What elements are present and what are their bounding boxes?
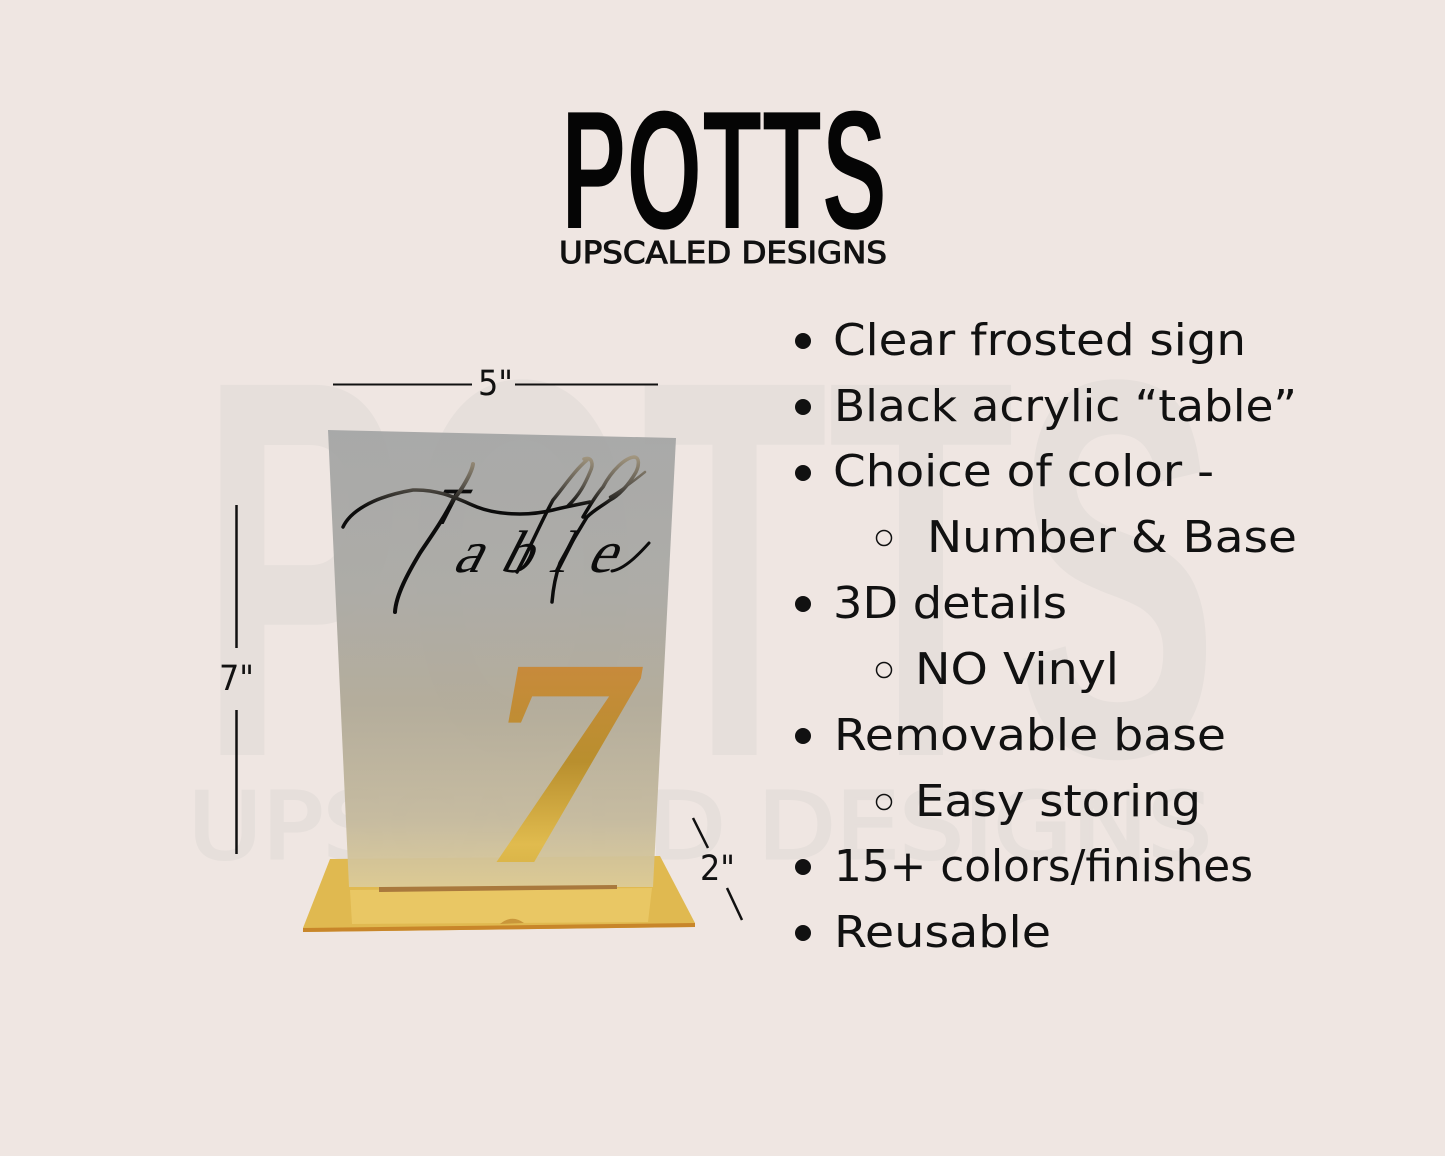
script flourishes xyxy=(343,457,649,612)
watermark: UPSCALED DESIGNS xyxy=(188,773,1212,880)
item: reusable: Reusable xyxy=(834,907,1051,958)
dimension: depth 2 inches xyxy=(693,818,742,920)
script word: Table: able xyxy=(445,518,659,585)
feature list xyxy=(795,315,1297,958)
dimension: width 5 inches: 5" xyxy=(478,364,513,404)
script word: Table xyxy=(343,457,678,612)
gold number 7: 7 xyxy=(484,597,647,927)
base slot xyxy=(379,885,617,892)
sub-item: number and base: Number & Base xyxy=(927,512,1297,563)
sub-item: no vinyl: NO Vinyl xyxy=(915,644,1119,695)
gold mirror base xyxy=(303,856,695,932)
item: black acrylic table: Black acrylic “table” xyxy=(834,381,1297,432)
item: removable base: Removable base xyxy=(834,710,1226,761)
product: table number sign xyxy=(303,430,695,932)
item: 3D details: 3D details xyxy=(833,578,1067,629)
subtitle: UPSCALED DESIGNS xyxy=(559,236,887,271)
script word: Table: T xyxy=(420,480,479,535)
item: clear frosted sign: Clear frosted sign xyxy=(833,315,1246,366)
frosted sign panel xyxy=(328,430,676,887)
title: POTTS xyxy=(561,75,887,266)
dimension: height 7 inches: 7" xyxy=(219,659,254,699)
item: choice of color: Choice of color - xyxy=(833,446,1214,497)
dimension: depth 2 inches: 2" xyxy=(700,849,735,889)
item: colors and finishes: 15+ colors/finishes xyxy=(834,841,1253,892)
sub-item: easy storing: Easy storing xyxy=(915,776,1201,827)
